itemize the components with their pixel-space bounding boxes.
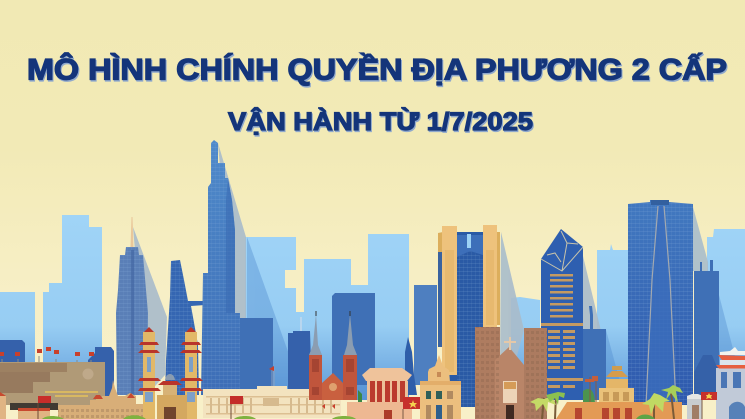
building: Hanoi tower pavilion [420,355,461,419]
building: Ho Chi Minh mausoleum [347,368,412,419]
building: Reunification Palace [203,366,341,419]
building: Hanoi museum right [687,347,745,419]
tower: Landmark 81 [201,140,240,395]
building: Opera House [556,366,682,419]
tower: diamond crown tower [541,229,583,400]
icon: palm trees [530,385,683,419]
tower: dark silhouette right [694,355,719,400]
building: brown convention hall [0,362,105,410]
building: Notre-Dame cathedral [309,311,357,400]
skyline: cast shadows [133,143,708,400]
building: Cao Dai temple [138,327,203,419]
tower: tall curved glass tower [628,200,693,405]
tower: gold twin tower [438,225,500,407]
tower: Vietcombank [116,217,148,395]
skyline: light blue background towers [0,215,745,400]
building: Hanoi cathedral [475,327,547,419]
building: city hall [0,380,143,419]
flags row left [0,347,94,372]
icon: Vietnamese flag centre [403,397,424,419]
tower: Bitexco [165,260,207,395]
subtitle: VẬN HÀNH TỪ 1/7/2025 [229,108,534,138]
shrubs along bottom edge [42,415,356,419]
subtitle: VẬN HÀNH TỪ 1/7/2025 [228,106,533,136]
skyline: mid blue towers [0,260,719,400]
title: MÔ HÌNH CHÍNH QUYỀN ĐỊA PHƯƠNG 2 CẤP [28,54,728,88]
title: MÔ HÌNH CHÍNH QUYỀN ĐỊA PHƯƠNG 2 CẤP [27,52,727,86]
